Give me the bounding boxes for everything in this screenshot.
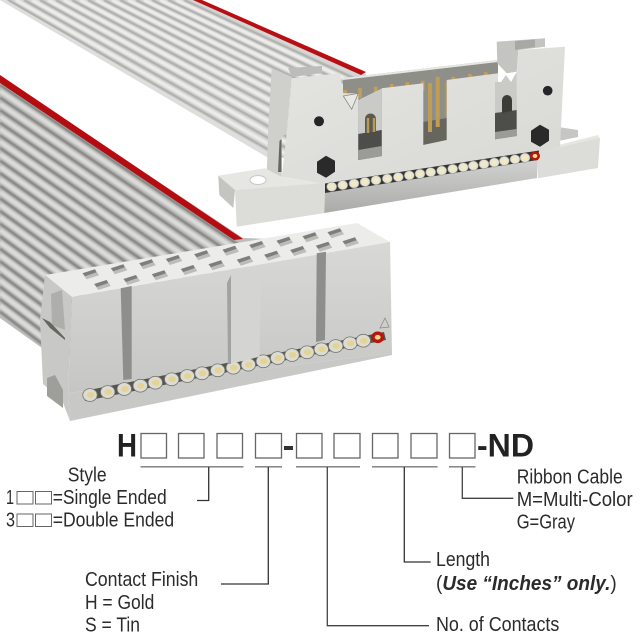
style option 3: 3: [6, 510, 15, 532]
upper connector: shrouded header: [218, 38, 600, 227]
contacts leader line: [327, 467, 429, 626]
separator dash: [284, 446, 293, 450]
contacts text: No. of Contacts: [436, 614, 559, 636]
ribbon text: Ribbon Cable: [517, 466, 623, 488]
tall gold pins: [430, 77, 438, 132]
upper connector contacts: [327, 152, 540, 191]
pin 1 triangle: [380, 318, 389, 328]
callout: length: [404, 467, 617, 595]
contact band: [84, 332, 386, 401]
callout: ribbon cable: [462, 466, 633, 533]
ribbon leader line: [462, 467, 513, 498]
left side face: [40, 275, 72, 421]
lower ribbon cable: [0, 75, 263, 355]
hexagonal holes: [317, 156, 335, 178]
group underlines: [140, 466, 476, 468]
contact finish text: Contact Finish: [85, 569, 198, 591]
pin 1 triangle: [343, 93, 358, 109]
code boxes: [141, 434, 475, 458]
style option 3: [6, 510, 174, 532]
centre window floor: [423, 118, 447, 145]
ribbon text: M=Multi-Color: [517, 489, 633, 511]
lower connector: IDC socket: [40, 223, 392, 421]
callout: number of contacts: [327, 467, 559, 636]
lower connector contacts: [83, 332, 384, 401]
left arch slot with pins: [365, 114, 376, 133]
length text: (Use “Inches” only.): [436, 573, 617, 595]
left tower side: [267, 68, 292, 177]
style option 1: =Single Ended: [53, 487, 167, 509]
contact finish text: H = Gold: [85, 592, 154, 614]
style option 3: =Double Ended: [53, 510, 174, 532]
prefix H: H: [117, 428, 137, 464]
top face: [45, 223, 390, 297]
centre latch tab: [227, 269, 261, 364]
round holes: [314, 116, 324, 126]
style leader line: [197, 467, 209, 500]
back row pins: [345, 72, 486, 100]
front face: [68, 242, 392, 393]
red wire, lower ribbon: [0, 75, 243, 240]
shroud front face: [282, 47, 565, 184]
socket holes, front row: [94, 237, 359, 290]
style option 1: 1: [6, 487, 14, 509]
lower strip: [68, 353, 392, 421]
right arch slot: [502, 95, 512, 113]
flange right block: [558, 127, 578, 141]
ribbon text: [517, 466, 633, 533]
right tower back: [497, 38, 545, 73]
contact finish text: [85, 569, 198, 637]
length text: Length: [436, 549, 490, 571]
contact band: [325, 150, 539, 193]
part number code: [117, 428, 534, 467]
left groove: [121, 286, 132, 380]
style option 1: [6, 487, 167, 509]
callout: style: [6, 465, 209, 532]
style heading: Style: [68, 465, 107, 487]
upper ribbon cable: [0, 0, 366, 158]
length leader line: [404, 467, 431, 562]
suffix -ND: -ND: [477, 428, 534, 464]
flange left ear: [218, 168, 325, 190]
socket holes, back row: [82, 228, 344, 279]
right groove: [316, 252, 326, 342]
red wire, upper ribbon: [193, 0, 366, 75]
flange right bar: [538, 135, 600, 153]
callout: contact finish: [85, 467, 268, 637]
left slot panel: [358, 88, 382, 134]
contact finish leader line: [221, 467, 268, 584]
length text: [436, 549, 617, 595]
right slot panel: [495, 72, 517, 113]
interior of shroud: [343, 60, 498, 170]
strip under contacts: [324, 160, 538, 213]
ribbon text: G=Gray: [517, 511, 575, 533]
contact finish text: S = Tin: [85, 615, 140, 637]
